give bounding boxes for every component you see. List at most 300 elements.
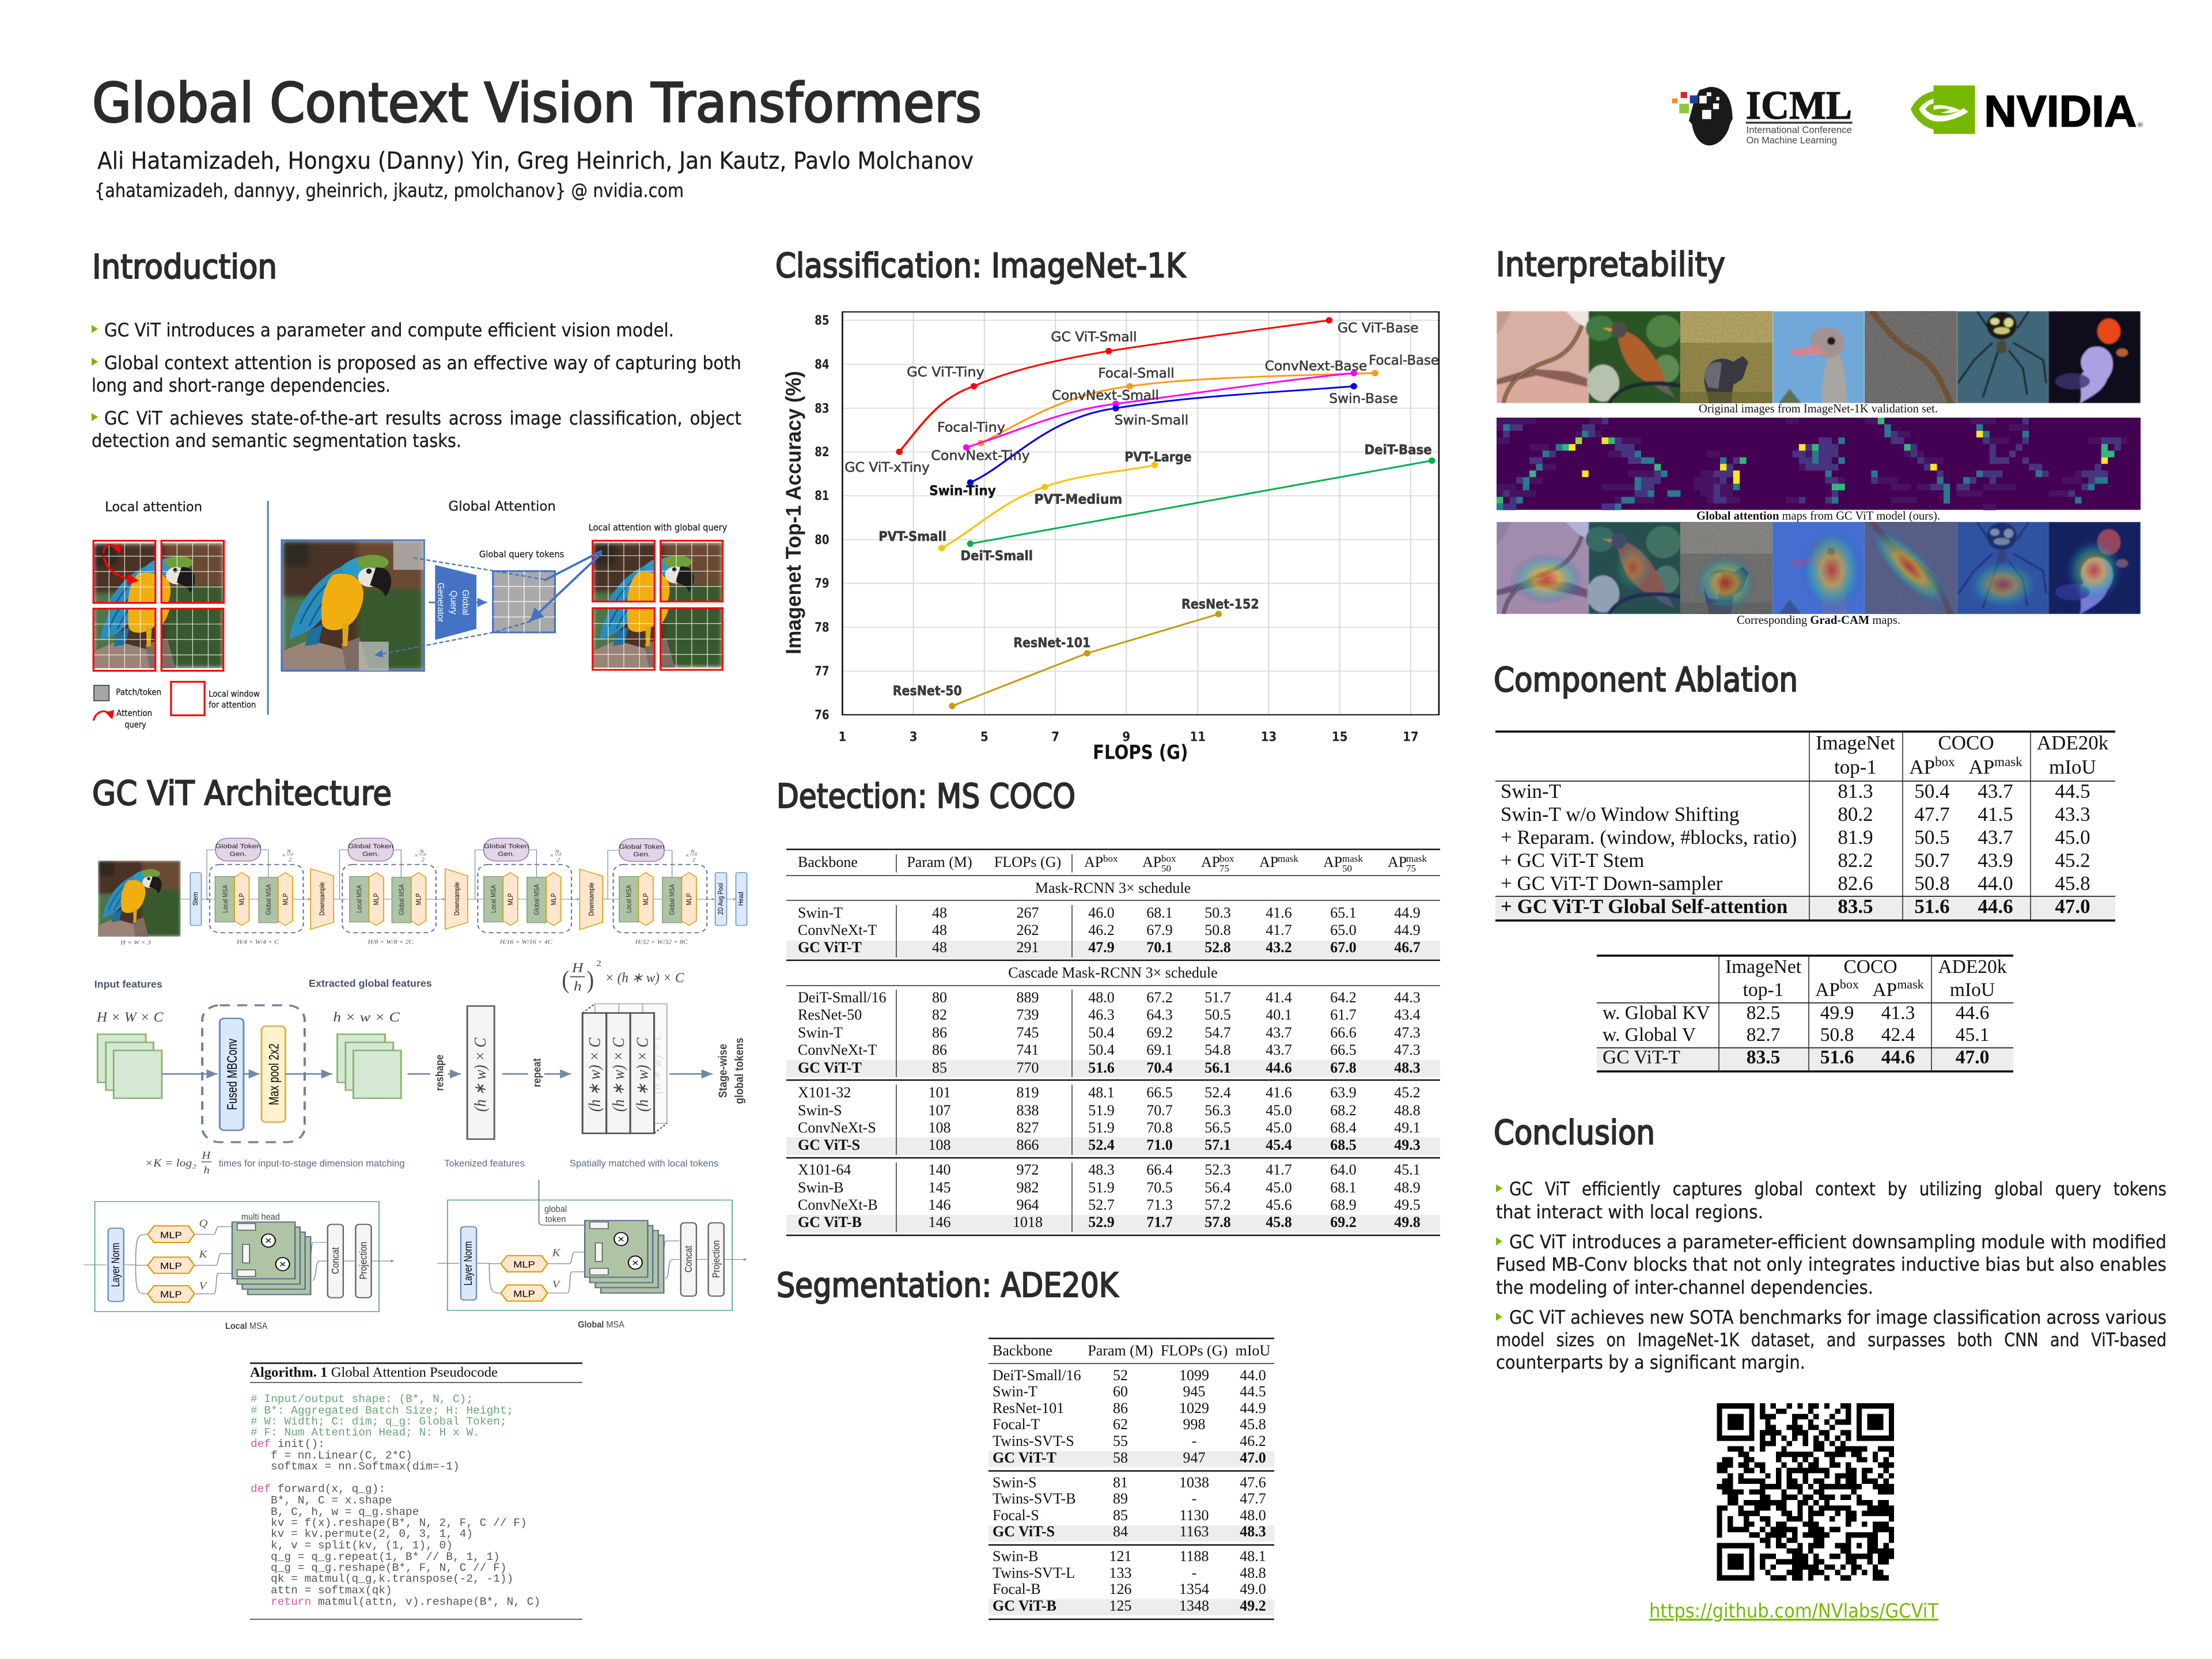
- panel: Global MSA: MLP: [513, 1289, 535, 1299]
- rows: Focal-T: [993, 1416, 1040, 1433]
- rows: 1130: [1179, 1507, 1209, 1524]
- rows: 60: [1113, 1383, 1128, 1400]
- table rows: 41.7: [1266, 1161, 1292, 1178]
- authors: Ali Hatamizadeh, Hongxu (Danny) Yin, Greg Heinrich, Jan Kautz, Pavlo Molchanov: [97, 147, 974, 175]
- stage 1: Global MSA: [265, 884, 272, 915]
- rows: 44.6: [1978, 895, 2013, 918]
- table header: 50: [1342, 863, 1352, 874]
- table rows: 71.0: [1146, 1137, 1173, 1153]
- panel: overall pipeline: [98, 838, 747, 946]
- rows: Backbone: [993, 1342, 1052, 1359]
- captions: H: [201, 1150, 211, 1161]
- rows: 49.2: [1240, 1597, 1266, 1614]
- stage 4: H/32 × W/32 × 8C: [635, 939, 688, 945]
- rows: 1029: [1179, 1400, 1209, 1416]
- rows: 58: [1113, 1449, 1128, 1466]
- panel: global attention: [282, 498, 728, 671]
- table rows: DeiT-Small/16: [798, 989, 887, 1006]
- panel: Global MSA: ×: [632, 1257, 639, 1268]
- header and rows: 82.5: [1747, 1002, 1780, 1024]
- table rows: 86: [932, 1041, 947, 1058]
- data labels: ResNet-50: [893, 683, 962, 699]
- data labels: ConvNext-Small: [1052, 388, 1159, 403]
- code listing: return matmul(attn, v).reshape(B*, N, C): [271, 1596, 540, 1608]
- stage 1: [207, 838, 310, 945]
- stage 2: Global Token: [348, 843, 393, 850]
- table header: Param (M): [907, 854, 972, 870]
- rows: 47.6: [1240, 1474, 1266, 1491]
- block: repeated tokens: (h ∗ w) × C: [609, 1037, 627, 1112]
- stage 2: H/8 × W/8 × 2C: [367, 939, 414, 945]
- data labels: Focal-Tiny: [937, 420, 1005, 435]
- axis tick labels: 85: [815, 313, 829, 328]
- header: AP: [1968, 756, 1994, 778]
- rows: 50.7: [1914, 849, 1950, 872]
- rows: 51.6: [1914, 895, 1950, 918]
- logo: ICML: [1672, 82, 1853, 146]
- rows: 947: [1183, 1449, 1205, 1466]
- header and rows: mIoU: [1950, 979, 1995, 1001]
- rows: -: [1192, 1433, 1196, 1449]
- code listing: q_g = q_g.reshape(B*, F, N, C // F): [271, 1562, 507, 1574]
- code listing: B*, N, C = x.shape: [271, 1494, 392, 1507]
- table rows: 47.3: [1394, 1024, 1421, 1041]
- stage 2: Global MSA: [398, 884, 406, 915]
- x axis title: FLOPS (G): [1093, 741, 1188, 764]
- table rows: 51.6: [1088, 1059, 1115, 1076]
- table rows: ConvNeXt-B: [798, 1196, 878, 1213]
- stage 2: N₂: [419, 849, 426, 855]
- table rows: 48.8: [1394, 1102, 1421, 1119]
- rows: 1188: [1179, 1548, 1209, 1565]
- table rows: 49.1: [1394, 1119, 1421, 1136]
- panel: global token generation: Stage-wise: [717, 1044, 730, 1098]
- rows: 43.3: [2055, 803, 2090, 825]
- header and rows: box: [1840, 977, 1859, 991]
- stage 3: MLP: [507, 893, 514, 905]
- table rows: 43.2: [1266, 939, 1292, 956]
- rows: 1348: [1179, 1597, 1209, 1614]
- table header: AP: [1323, 854, 1342, 870]
- table rows: 68.9: [1330, 1196, 1357, 1213]
- table: detection MS COCO: Cascade Mask-RCNN 3× schedule: [1008, 964, 1218, 981]
- table rows: 66.4: [1146, 1161, 1173, 1178]
- header and rows: mask: [1897, 977, 1924, 991]
- rows: + GC ViT-T Stem: [1501, 849, 1644, 872]
- table rows: 45.4: [1266, 1137, 1292, 1153]
- block: repeated tokens: (h ∗ w) × C: [632, 1037, 652, 1112]
- stage 4: Global Token: [619, 843, 664, 850]
- text block: conclusion bullets: counterparts by a significant margin.: [1496, 1351, 1805, 1373]
- data labels: [844, 321, 1439, 699]
- header and rows: AP: [1815, 979, 1840, 1001]
- table rows: 43.7: [1266, 1041, 1292, 1058]
- stage 3: Global Token: [483, 843, 529, 850]
- table rows: 54.8: [1205, 1041, 1231, 1058]
- series: ResNet: [949, 611, 1222, 709]
- panel: Local MSA: Concat: [330, 1247, 341, 1274]
- stage 2: MLP: [373, 893, 380, 905]
- table rows: 889: [1016, 989, 1039, 1006]
- table rows: 64.2: [1330, 989, 1357, 1006]
- rows: 81.9: [1838, 826, 1873, 849]
- series: ConvNext: [963, 370, 1357, 450]
- table rows: Swin-T: [798, 904, 843, 921]
- table header: 75: [1406, 863, 1416, 874]
- stage 3: H/16 × W/16 × 4C: [499, 939, 552, 945]
- stage 4: Local MSA: [626, 885, 633, 913]
- panel: global token generation: reshape: [433, 1055, 446, 1091]
- block: tokenized features: (h ∗ w) × C: [471, 1037, 489, 1112]
- rows: GC ViT-T: [993, 1449, 1056, 1466]
- panel: Global MSA: K: [552, 1248, 561, 1259]
- axis tick labels: 11: [1190, 730, 1206, 745]
- rows: 44.5: [1240, 1383, 1266, 1400]
- table rows: 57.1: [1205, 1137, 1231, 1153]
- table rows: 48: [932, 922, 947, 938]
- code listing: attn = softmax(qk): [271, 1584, 392, 1597]
- formula: repeated token count: ): [586, 967, 594, 994]
- stage 2: 2: [421, 857, 425, 863]
- data labels: GC ViT-Base: [1338, 321, 1419, 336]
- table rows: 972: [1016, 1161, 1039, 1178]
- table rows: 52.7: [1088, 1196, 1115, 1213]
- panel: global attention heatmaps: [1497, 418, 2141, 522]
- logo: ICML: On Machine Learning: [1747, 135, 1837, 146]
- table: global query variants: [1597, 956, 2013, 1071]
- header and rows: 50.8: [1820, 1024, 1854, 1046]
- heading: Classification: Classification: ImageNet-1K: [775, 246, 1187, 285]
- header and rows: 42.4: [1881, 1024, 1915, 1046]
- data labels: Swin-Tiny: [929, 483, 996, 498]
- panel: overall pipeline: H × W × 3: [120, 940, 151, 946]
- stage 1: 2: [289, 857, 292, 863]
- rows: Swin-B: [993, 1548, 1038, 1565]
- axis tick labels: 9: [1122, 730, 1130, 745]
- header and rows: 44.6: [1956, 1002, 1989, 1024]
- icon: global query generator: Global: [460, 590, 470, 615]
- table rows: 267: [1016, 904, 1039, 921]
- panel: Local MSA: Q: [199, 1218, 208, 1229]
- grid: global query tokens: [493, 571, 555, 632]
- table rows: 866: [1016, 1137, 1039, 1153]
- code listing: B, C, h, w = q_g.shape: [271, 1506, 419, 1518]
- stage 4: ×: [685, 853, 690, 859]
- table header: FLOPs (G): [994, 854, 1061, 870]
- table rows: 66.6: [1330, 1024, 1357, 1041]
- table rows: 57.8: [1205, 1214, 1231, 1230]
- table rows: 52.4: [1205, 1084, 1231, 1101]
- table rows: 65.1: [1330, 904, 1357, 921]
- panel: Global MSA: MLP: [513, 1260, 535, 1270]
- legend: patch, window and query: Attention: [116, 709, 152, 718]
- table rows: 51.7: [1205, 989, 1231, 1006]
- rows: DeiT-Small/16: [993, 1367, 1081, 1384]
- table rows: 68.4: [1330, 1119, 1357, 1136]
- table header: AP: [1142, 854, 1161, 870]
- rows: + GC ViT-T Global Self-attention: [1501, 895, 1787, 918]
- panel: original images: [1497, 311, 2141, 415]
- table rows: 66.5: [1146, 1084, 1173, 1101]
- table rows: 140: [929, 1161, 950, 1178]
- code listing: kv = f(x).reshape(B*, N, 2, F, C // F): [271, 1517, 527, 1529]
- panel: global token generation: H × W × C: [96, 1009, 164, 1025]
- table rows: 70.5: [1146, 1179, 1173, 1196]
- stage 1: Local MSA: [222, 885, 229, 913]
- stage 3: ×: [550, 853, 554, 859]
- block: repeated tokens: (h ∗ w) × C: [649, 1032, 665, 1094]
- rows: 50.8: [1914, 872, 1950, 895]
- icon: extracted feature maps: [337, 1034, 401, 1099]
- logo: NVIDIA: [1911, 85, 2143, 136]
- axis tick labels: 83: [815, 401, 829, 416]
- rows: 55: [1113, 1433, 1128, 1449]
- axis tick labels: 17: [1403, 730, 1419, 745]
- table rows: 67.0: [1330, 939, 1357, 956]
- data labels: DeiT-Base: [1365, 442, 1432, 457]
- icon: downsample 2: [445, 869, 468, 929]
- stage 3: N₃: [554, 849, 562, 855]
- rows: Swin-T w/o Window Shifting: [1501, 803, 1739, 825]
- axis tick labels: 1: [839, 730, 846, 745]
- rows: 126: [1109, 1581, 1131, 1597]
- block: Max pool: Max pool 2x2: [266, 1043, 282, 1105]
- y axis title: Imagenet Top-1 Accuracy (%): [782, 371, 805, 654]
- panel: Local MSA: MLP: [160, 1230, 182, 1240]
- rows: 43.7: [1978, 780, 2013, 802]
- panel: Local MSA: multi head: [241, 1212, 280, 1222]
- table rows: 49.8: [1394, 1214, 1421, 1230]
- table rows: 47.9: [1088, 939, 1115, 956]
- data labels: Focal-Base: [1369, 353, 1439, 368]
- stage 3: 2: [557, 857, 560, 863]
- table header: AP: [1084, 854, 1103, 870]
- panel: Global MSA: [437, 1180, 747, 1330]
- rows: 44.0: [1978, 872, 2013, 895]
- table rows: X101-64: [798, 1161, 851, 1178]
- rows: 89: [1113, 1490, 1128, 1507]
- table rows: 71.3: [1146, 1196, 1173, 1213]
- table rows: 47.3: [1394, 1041, 1421, 1058]
- rows: 41.5: [1978, 803, 2013, 825]
- rows: Twins-SVT-S: [993, 1433, 1074, 1449]
- stage 3: Local MSA: [490, 885, 498, 913]
- table header: mask: [1406, 853, 1427, 864]
- table rows: 827: [1016, 1119, 1039, 1136]
- rows: 50.5: [1914, 826, 1950, 849]
- captions: Spatially matched with local tokens: [570, 1158, 718, 1169]
- text block: introduction bullets: Global context attention is proposed as an effective way of capturing both: [104, 352, 741, 374]
- table rows: 45.0: [1266, 1179, 1292, 1196]
- table rows: 45.1: [1394, 1161, 1421, 1178]
- text block: conclusion bullets: the modeling of inter-channel dependencies.: [1496, 1277, 1873, 1298]
- table rows: 46.7: [1394, 939, 1421, 956]
- table rows: GC ViT-S: [798, 1137, 860, 1153]
- captions: [145, 1150, 718, 1176]
- icon: global query generator: Generator: [435, 582, 445, 622]
- data labels: Swin-Small: [1115, 412, 1188, 428]
- stage 3: Gen.: [498, 850, 515, 858]
- panel: Local MSA: ×: [279, 1259, 286, 1270]
- code listing: softmax = nn.Softmax(dim=-1): [271, 1460, 460, 1473]
- rows: GC ViT-B: [993, 1597, 1056, 1614]
- panel: algorithm pseudocode: Algorithm. 1 Global Attention Pseudocode: [250, 1365, 498, 1380]
- header and rows: top-1: [1743, 979, 1783, 1001]
- rows: 44.5: [2055, 780, 2090, 802]
- table rows: 48: [932, 939, 947, 956]
- table rows: 66.5: [1330, 1041, 1357, 1058]
- stage 2: Local MSA: [356, 885, 363, 913]
- table rows: 108: [929, 1137, 950, 1153]
- table rows: 819: [1016, 1084, 1039, 1101]
- code listing: kv = kv.permute(2, 0, 3, 1, 4): [271, 1528, 473, 1540]
- table rows: 65.0: [1330, 922, 1357, 938]
- panel: algorithm pseudocode: [250, 1363, 582, 1619]
- table header: box: [1161, 853, 1176, 864]
- data labels: PVT-Large: [1124, 449, 1192, 465]
- table rows: 50.4: [1088, 1024, 1115, 1041]
- table rows: 41.4: [1266, 989, 1292, 1006]
- table header: AP: [1201, 854, 1220, 870]
- table rows: 68.1: [1146, 904, 1173, 921]
- stage 1: ×: [281, 853, 286, 859]
- icon: global query generator: Query: [448, 590, 459, 615]
- rows: 81.3: [1838, 780, 1873, 802]
- header and rows: 82.7: [1747, 1024, 1780, 1046]
- table rows: 51.9: [1088, 1179, 1115, 1196]
- table rows: 45.2: [1394, 1084, 1421, 1101]
- rows: GC ViT-S: [993, 1523, 1055, 1540]
- rows: 82.2: [1838, 849, 1873, 872]
- data labels: GC ViT-xTiny: [844, 460, 930, 475]
- stage 3: MLP: [550, 893, 558, 905]
- table rows: 741: [1016, 1041, 1039, 1058]
- panel: global token generation: h × w × C: [333, 1009, 400, 1025]
- table rows: 82: [932, 1006, 947, 1023]
- panel: Grad-CAM maps: Corresponding Grad-CAM maps.: [1737, 613, 1900, 627]
- rows: 44.9: [1240, 1400, 1266, 1416]
- panel: Local MSA: V: [199, 1281, 208, 1292]
- table rows: 52.4: [1088, 1137, 1115, 1153]
- table rows: 291: [1016, 939, 1039, 956]
- heading: Detection: Detection: MS COCO: [777, 777, 1075, 816]
- header and rows: 41.3: [1881, 1002, 1915, 1024]
- rows: 47.0: [1240, 1449, 1266, 1466]
- table rows: 56.1: [1205, 1059, 1231, 1076]
- text block: conclusion bullets: Fused MB-Conv blocks that not only integrates inductive bias but also enables: [1496, 1253, 2166, 1275]
- table rows: 69.1: [1146, 1041, 1173, 1058]
- logo: NVIDIA: NVIDIA: [1984, 86, 2137, 136]
- axis tick labels: 84: [815, 357, 829, 372]
- table rows: ConvNeXt-T: [798, 1041, 877, 1058]
- formula: repeated token count: [562, 959, 684, 994]
- formula: repeated token count: H: [571, 961, 585, 975]
- rows: -: [1192, 1565, 1196, 1581]
- rows: 133: [1109, 1565, 1131, 1581]
- table rows: 46.0: [1088, 904, 1115, 921]
- logo: ICML: ICML: [1746, 82, 1852, 127]
- rows: 49.0: [1240, 1581, 1266, 1597]
- table header: AP: [1259, 854, 1278, 870]
- table rows: GC ViT-T: [798, 939, 862, 956]
- text block: introduction bullets: GC ViT introduces a parameter and compute efficient vision model.: [104, 319, 674, 341]
- panel: global attention: Local attention with global query: [589, 522, 728, 533]
- table header: mask: [1278, 853, 1298, 864]
- rows: Swin-T: [1501, 780, 1561, 802]
- header and rows: ImageNet: [1725, 956, 1802, 978]
- table rows: ConvNeXt-T: [798, 922, 877, 938]
- table rows: 51.9: [1088, 1119, 1115, 1136]
- rows: [993, 1342, 1271, 1614]
- panel: global attention heatmaps: Global attention maps from GC ViT model (ours).: [1696, 509, 1940, 522]
- icon: downsample 2: Downsample: [453, 882, 461, 915]
- table rows: 50.3: [1205, 904, 1231, 921]
- table rows: 56.5: [1205, 1119, 1231, 1136]
- heading: Segmentation: Segmentation: ADE20K: [777, 1266, 1119, 1305]
- rows: 81: [1113, 1474, 1128, 1491]
- table rows: 146: [929, 1196, 950, 1213]
- table rows: 44.6: [1266, 1059, 1292, 1076]
- table rows: Swin-B: [798, 1179, 843, 1196]
- rows: 1038: [1179, 1474, 1209, 1491]
- captions: times for input-to-stage dimension matching: [219, 1158, 405, 1169]
- rows: 45.2: [2055, 849, 2090, 872]
- captions: Tokenized features: [444, 1158, 525, 1169]
- header and rows: 45.1: [1956, 1024, 1989, 1046]
- table rows: 61.7: [1330, 1006, 1357, 1023]
- table rows: 43.4: [1394, 1006, 1421, 1023]
- table rows: 46.3: [1088, 1006, 1115, 1023]
- stage 2: Gen.: [362, 850, 379, 858]
- header and rows: w. Global KV: [1603, 1002, 1710, 1024]
- table rows: 45.0: [1266, 1102, 1292, 1119]
- table rows: 49.3: [1394, 1137, 1421, 1153]
- formula: repeated token count: h: [574, 980, 582, 994]
- table rows: 44.3: [1394, 989, 1421, 1006]
- table rows: 45.8: [1266, 1214, 1292, 1230]
- axis tick labels: 79: [815, 576, 829, 591]
- rows: -: [1192, 1490, 1196, 1507]
- rows: 48.1: [1240, 1548, 1266, 1565]
- table rows: 69.2: [1330, 1214, 1357, 1230]
- rows: 1354: [1179, 1581, 1209, 1597]
- table rows: 41.6: [1266, 904, 1292, 921]
- rows: 45.8: [2055, 872, 2090, 895]
- table rows: 64.0: [1330, 1161, 1357, 1178]
- table rows: ConvNeXt-S: [798, 1119, 876, 1136]
- data labels: PVT-Small: [878, 529, 946, 544]
- stage 2: MLP: [415, 893, 423, 905]
- rows: + GC ViT-T Down-sampler: [1501, 872, 1723, 895]
- table rows: 48.3: [1394, 1059, 1421, 1076]
- link: GitHub repository: https://github.com/NVlabs/GCViT: [1649, 1600, 1938, 1623]
- header and rows: 49.9: [1820, 1002, 1854, 1024]
- data labels: DeiT-Small: [961, 548, 1033, 564]
- table rows: 67.9: [1146, 922, 1173, 938]
- code listing: qk = matmul(q_g,k.transpose(-2, -1)): [271, 1573, 513, 1585]
- stage 3: Global MSA: [533, 884, 541, 915]
- table rows: 67.2: [1146, 989, 1173, 1006]
- block: tokenized features: [467, 1006, 494, 1139]
- axis tick labels: 78: [815, 620, 829, 635]
- panel: local attention: [93, 499, 224, 671]
- table rows: 50.5: [1205, 1006, 1231, 1023]
- data labels: GC ViT-Tiny: [907, 365, 984, 380]
- data labels: ConvNext-Tiny: [931, 448, 1030, 463]
- rows: 48.0: [1240, 1507, 1266, 1524]
- header and rows: 44.6: [1881, 1047, 1915, 1068]
- table rows: [798, 904, 1421, 1230]
